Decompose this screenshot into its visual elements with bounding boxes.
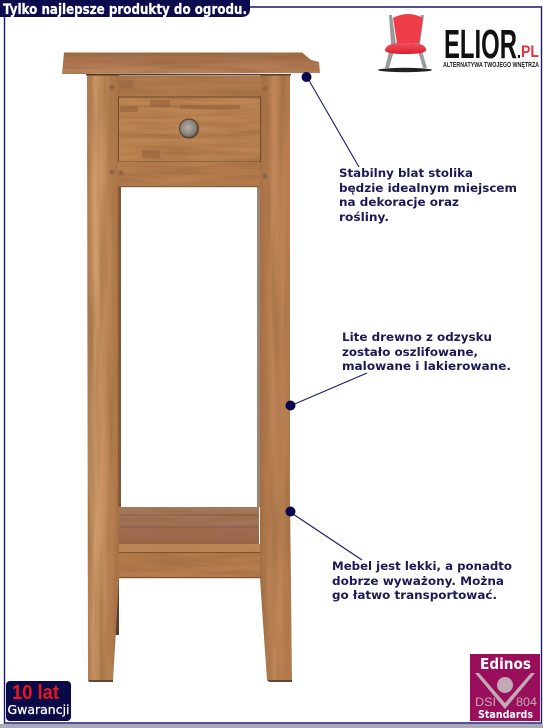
logo: Elior: PL xyxy=(521,42,539,61)
badge: Edinos DSI 804 Standards: Standards xyxy=(478,709,533,721)
callout: light and balanced: dobrze wyważony. Można xyxy=(332,574,504,588)
apron xyxy=(119,76,261,97)
callout: light and balanced: Mebel jest lekki, a ponadto xyxy=(332,559,512,573)
callout: table top: będzie idealnym miejscem xyxy=(339,181,517,195)
callout: reclaimed wood: malowane i lakierowane. xyxy=(342,359,511,373)
rear right leg edge xyxy=(257,187,261,507)
drawer xyxy=(118,97,261,162)
callout: light and balanced: go łatwo transportować. xyxy=(332,588,497,602)
callout: table top xyxy=(302,72,517,224)
callout: light and balanced xyxy=(286,506,512,602)
callout: reclaimed wood xyxy=(286,330,511,410)
knob xyxy=(180,119,198,138)
screws xyxy=(110,84,268,178)
rear left leg xyxy=(115,578,119,635)
heading banner: Tylko najlepsze produkty do ogrodu. xyxy=(3,2,247,18)
left leg xyxy=(87,75,119,680)
badge: 10 year warranty: Gwarancji xyxy=(8,703,70,717)
table top xyxy=(62,52,320,74)
badge: Edinos DSI 804 Standards xyxy=(470,654,540,721)
badge: Edinos DSI 804 Standards: 804 xyxy=(516,695,537,709)
callout: reclaimed wood: Lite drewno z odzysku xyxy=(342,330,492,344)
right leg xyxy=(260,75,292,680)
badge: Edinos DSI 804 Standards: Edinos xyxy=(480,655,531,673)
logo: Elior: . xyxy=(517,41,521,63)
callout: table top: rośliny. xyxy=(339,210,389,224)
table illustration xyxy=(62,52,320,682)
callout: table top: na dekoracje oraz xyxy=(339,195,459,209)
badge: 10 year warranty: 10 lat xyxy=(12,682,59,704)
badge: Edinos DSI 804 Standards: DSI xyxy=(475,695,496,709)
badge: 10 year warranty xyxy=(6,681,71,721)
lower drawer rail xyxy=(118,162,260,187)
callout: reclaimed wood: zostało oszlifowane, xyxy=(342,345,478,359)
shelf top xyxy=(119,507,259,544)
callout: table top: Stabilny blat stolika xyxy=(339,166,473,180)
leg feet xyxy=(88,680,292,682)
icon: red chair xyxy=(378,14,432,72)
shelf front xyxy=(119,544,260,578)
logo: Elior xyxy=(378,14,539,72)
